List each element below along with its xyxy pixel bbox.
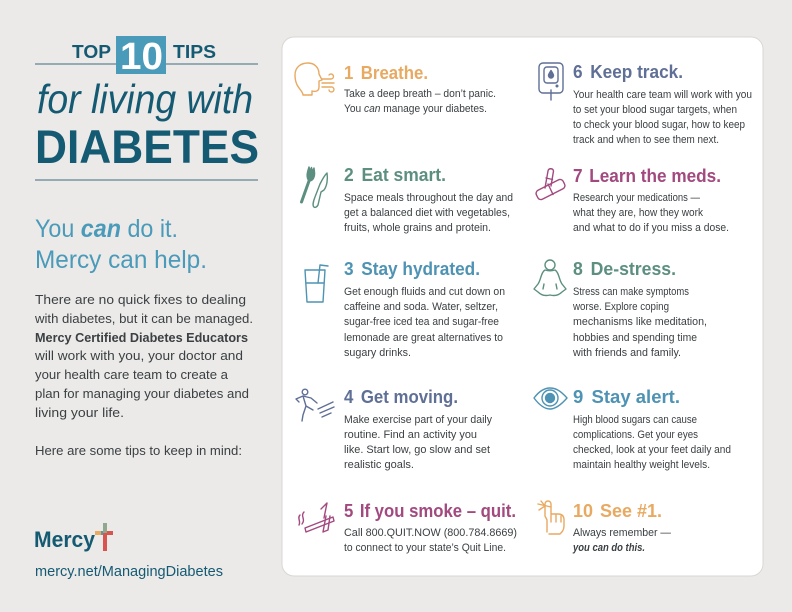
intro text: with diabetes, but it can be managed. xyxy=(34,311,253,326)
text: Space meals throughout the day and xyxy=(344,192,513,204)
text xyxy=(344,414,493,471)
text: Always remember — xyxy=(573,527,671,539)
text: Call 800.QUIT.NOW (800.784.8669) xyxy=(344,527,517,539)
icon: runner xyxy=(296,389,334,421)
heading: 4 Get moving. xyxy=(344,387,458,407)
text: to check your blood sugar, how to keep xyxy=(573,119,745,131)
website url: mercy.net/ManagingDiabetes xyxy=(35,563,223,580)
text: and what to do if you miss a dose. xyxy=(573,222,729,234)
heading: 10 See #1. xyxy=(573,501,662,521)
text: sugary drinks. xyxy=(344,347,411,359)
text: what they are, how they work xyxy=(572,207,704,219)
heading: for living with: for living with xyxy=(37,76,253,122)
text: Get enough fluids and cut down on xyxy=(344,286,505,298)
icon: meditating person xyxy=(534,260,566,296)
icon: broken cigarette xyxy=(299,503,334,532)
intro text: Mercy Certified Diabetes Educators xyxy=(35,330,248,345)
text: checked, look at your feet daily and xyxy=(573,444,731,456)
text: High blood sugars can cause xyxy=(573,414,697,426)
subheading: you can do it xyxy=(35,215,207,274)
tip 8 xyxy=(534,259,707,359)
text xyxy=(572,192,729,234)
text xyxy=(344,286,505,359)
intro text: Here are some tips to keep in mind: xyxy=(35,443,242,458)
text xyxy=(573,89,752,146)
text xyxy=(572,286,707,359)
text: worse. Explore coping xyxy=(572,301,669,313)
tip 6 xyxy=(539,62,752,146)
text: mechanisms like meditation, xyxy=(573,316,707,328)
text: Stress can make symptoms xyxy=(573,286,689,298)
text: you can do this. xyxy=(572,542,645,554)
heading: top: TOP xyxy=(72,42,111,62)
text: Take a deep breath – don’t panic. xyxy=(344,88,496,100)
text: track and when to see them next. xyxy=(573,134,719,146)
icon: eye xyxy=(534,388,567,409)
text: routine. Find an activity you xyxy=(344,429,477,441)
heading: 9 Stay alert. xyxy=(573,387,680,407)
text: realistic goals. xyxy=(344,459,414,471)
intro text: will work with you, your doctor and xyxy=(34,348,243,363)
icon: glass with straw xyxy=(305,265,328,302)
tip 4 xyxy=(296,387,493,471)
text: to set your blood sugar targets, when xyxy=(573,104,737,116)
text: fruits, whole grains and protein. xyxy=(344,222,491,234)
text xyxy=(344,88,496,115)
text xyxy=(344,527,517,554)
text: complications. Get your eyes xyxy=(573,429,698,441)
text: like. Start low, go slow and set xyxy=(344,444,490,456)
heading: 1 Breathe. xyxy=(344,63,428,83)
intro text xyxy=(34,292,253,458)
text xyxy=(344,192,513,234)
subheading: you can do it: You can do it. xyxy=(35,215,178,243)
heading: 5 If you smoke – quit. xyxy=(344,501,516,521)
text xyxy=(572,527,671,554)
heading: 6 Keep track. xyxy=(573,62,683,82)
tip 10 xyxy=(538,501,671,554)
icon: pills xyxy=(535,169,566,201)
text: lemonade are great alternatives to xyxy=(344,332,503,344)
text: with friends and family. xyxy=(572,347,681,359)
text: to connect to your state’s Quit Line. xyxy=(344,542,506,554)
intro text: plan for managing your diabetes and xyxy=(35,386,249,401)
panel: tips xyxy=(282,37,763,576)
icon: glucose meter xyxy=(539,63,563,100)
text: hobbies and spending time xyxy=(573,332,697,344)
intro text: your health care team to create a xyxy=(35,367,229,382)
heading: 8 De-stress. xyxy=(573,259,676,279)
icon: head breathing xyxy=(295,63,334,95)
text xyxy=(573,414,731,471)
tip 5 xyxy=(299,501,517,554)
icon: fork and knife xyxy=(302,167,327,207)
intro text: living your life. xyxy=(35,405,124,420)
text: caffeine and soda. Water, seltzer, xyxy=(344,301,498,313)
title block xyxy=(35,36,259,180)
badge: 10: 10 xyxy=(120,36,163,78)
heading: tips: TIPS xyxy=(173,42,216,62)
tip 7 xyxy=(535,166,729,234)
tip 9 xyxy=(534,387,731,471)
logo: Mercy: Mercy xyxy=(34,527,96,552)
heading: 2 Eat smart. xyxy=(344,165,446,185)
text: You can manage your diabetes. xyxy=(344,103,487,115)
tip 2 xyxy=(302,165,513,234)
text: maintain healthy weight levels. xyxy=(573,459,710,471)
tip 1 xyxy=(295,63,496,115)
tip 3 xyxy=(305,259,505,359)
text: sugar-free iced tea and sugar-free xyxy=(344,316,499,328)
text: Research your medications — xyxy=(573,192,700,204)
text: Your health care team will work with you xyxy=(573,89,752,101)
subheading: you can do it: Mercy can help. xyxy=(35,246,207,274)
intro text: There are no quick fixes to dealing xyxy=(35,292,246,307)
heading: 3 Stay hydrated. xyxy=(344,259,480,279)
icon: finger with string xyxy=(538,501,564,534)
heading: 7 Learn the meds. xyxy=(573,166,721,186)
heading: diabetes: DIABETES xyxy=(35,120,259,173)
text: Make exercise part of your daily xyxy=(344,414,493,426)
text: get a balanced diet with vegetables, xyxy=(344,207,510,219)
logo: Mercy xyxy=(34,523,113,552)
